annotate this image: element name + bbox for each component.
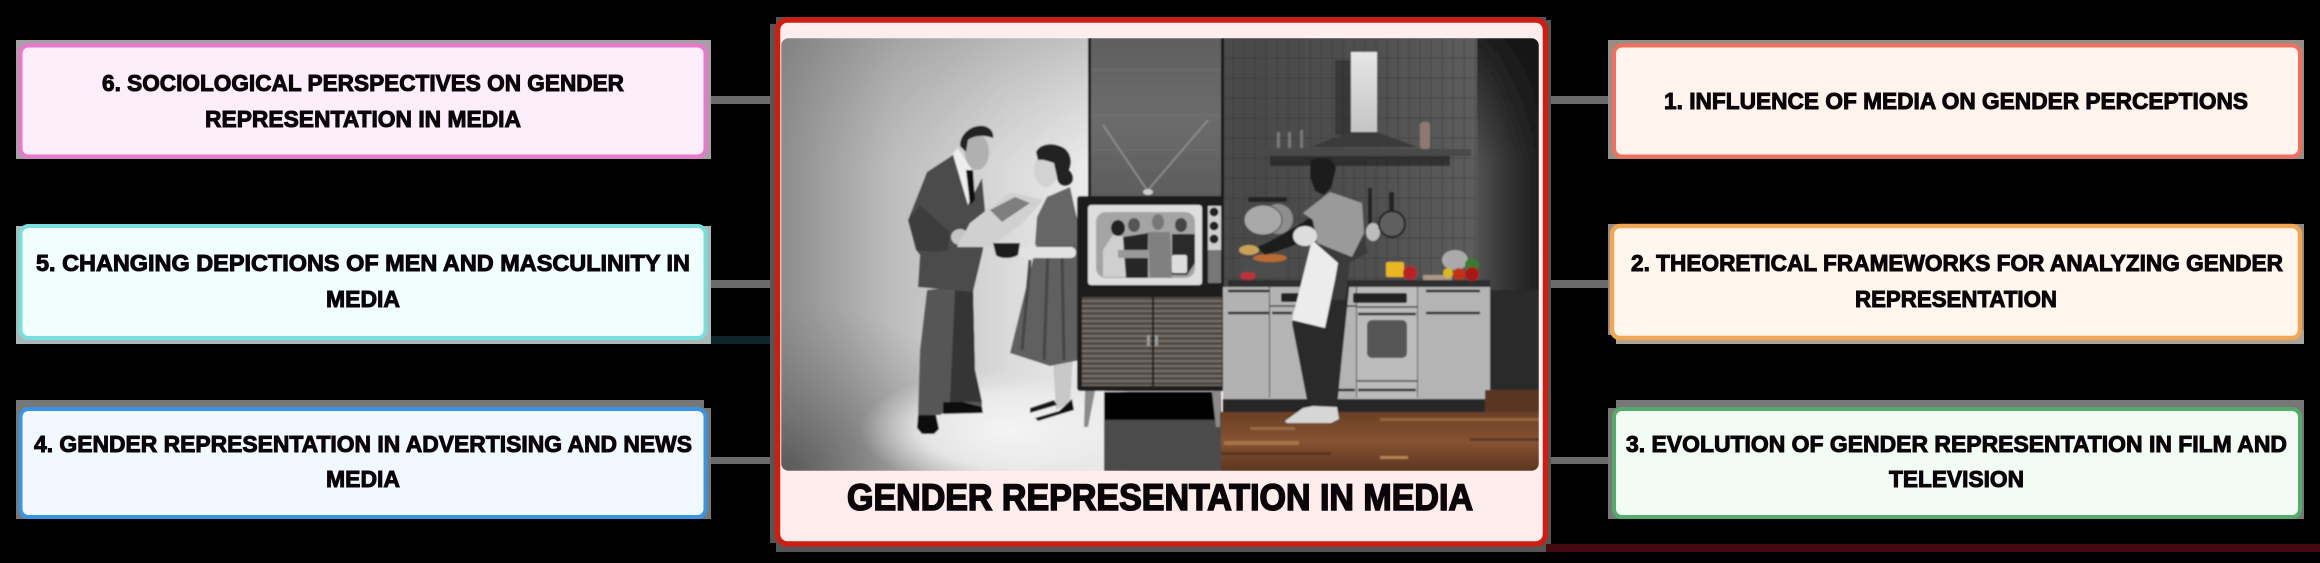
box 3 text: 3. EVOLUTION OF GENDER REPRESENTATION IN FILM AND (1626, 431, 2287, 457)
kitchen cabinets and oven (1223, 287, 1490, 399)
antenna (1103, 120, 1208, 190)
newspaper (957, 192, 1043, 247)
woman with bowl (993, 144, 1080, 421)
connector: box 5 shadow (704, 336, 772, 344)
box 3 text: TELEVISION (1889, 466, 2024, 492)
newspaper print (990, 197, 1030, 222)
box 5 text (36, 250, 690, 312)
main title: GENDER REPRESENTATION IN MEDIA (847, 477, 1473, 518)
toe kick (1223, 399, 1485, 412)
box 2 text: REPRESENTATION (1855, 286, 2057, 312)
box 5 text: MEDIA (326, 286, 400, 312)
connector: box 4 to centre (708, 457, 776, 464)
food and cookware (1239, 245, 1479, 281)
range hood (1265, 52, 1471, 166)
panel: central image and title (770, 17, 1551, 552)
box 1: influence of media (1608, 40, 2304, 159)
photo: kitchen scene (1221, 38, 1539, 471)
box 4 text (34, 431, 692, 492)
box 1 text: 1. INFLUENCE OF MEDIA ON GENDER PERCEPTIONS (1664, 88, 2248, 114)
hanging utensils (1244, 188, 1405, 241)
box 4 text: 4. GENDER REPRESENTATION IN ADVERTISING AND NEWS (34, 431, 692, 457)
box 6 text: REPRESENTATION IN MEDIA (205, 106, 521, 132)
box 4: advertising and news media (16, 400, 711, 519)
man with newspaper (908, 126, 993, 434)
people on screen (1103, 214, 1195, 278)
connector: box 6 to centre (708, 96, 776, 104)
box 2 text: 2. THEORETICAL FRAMEWORKS FOR ANALYZING GENDER (1631, 250, 2283, 276)
central photograph (781, 38, 1539, 492)
connector: bottom dark red band (1536, 544, 2320, 552)
connector: box 2 to centre (1546, 280, 1612, 288)
box 3 text (1626, 431, 2287, 492)
box 5 text: 5. CHANGING DEPICTIONS OF MEN AND MASCULINITY IN (36, 250, 690, 276)
box 3: evolution in film and television (1608, 400, 2304, 519)
box 5: changing depictions of men (16, 226, 711, 344)
television set (1077, 120, 1227, 427)
cabinet (1082, 297, 1222, 427)
box 6 text (102, 70, 624, 132)
counter (1228, 280, 1490, 287)
box 6: sociological perspectives (16, 40, 711, 159)
connector: box 3 to centre (1546, 457, 1612, 464)
box 2: theoretical frameworks (1608, 224, 2304, 344)
photo: left studio scene (781, 38, 1128, 471)
connector: box 1 to centre (1546, 96, 1612, 104)
box 4 text: MEDIA (326, 466, 400, 492)
cook at the stove (1257, 158, 1368, 423)
connector: box 5 to centre (708, 280, 776, 288)
photo: middle concrete panel (1088, 38, 1221, 471)
box 6 text: 6. SOCIOLOGICAL PERSPECTIVES ON GENDER (102, 70, 624, 96)
box 2 text (1631, 250, 2283, 312)
wood floor (1221, 390, 1539, 471)
controls (1208, 206, 1221, 283)
